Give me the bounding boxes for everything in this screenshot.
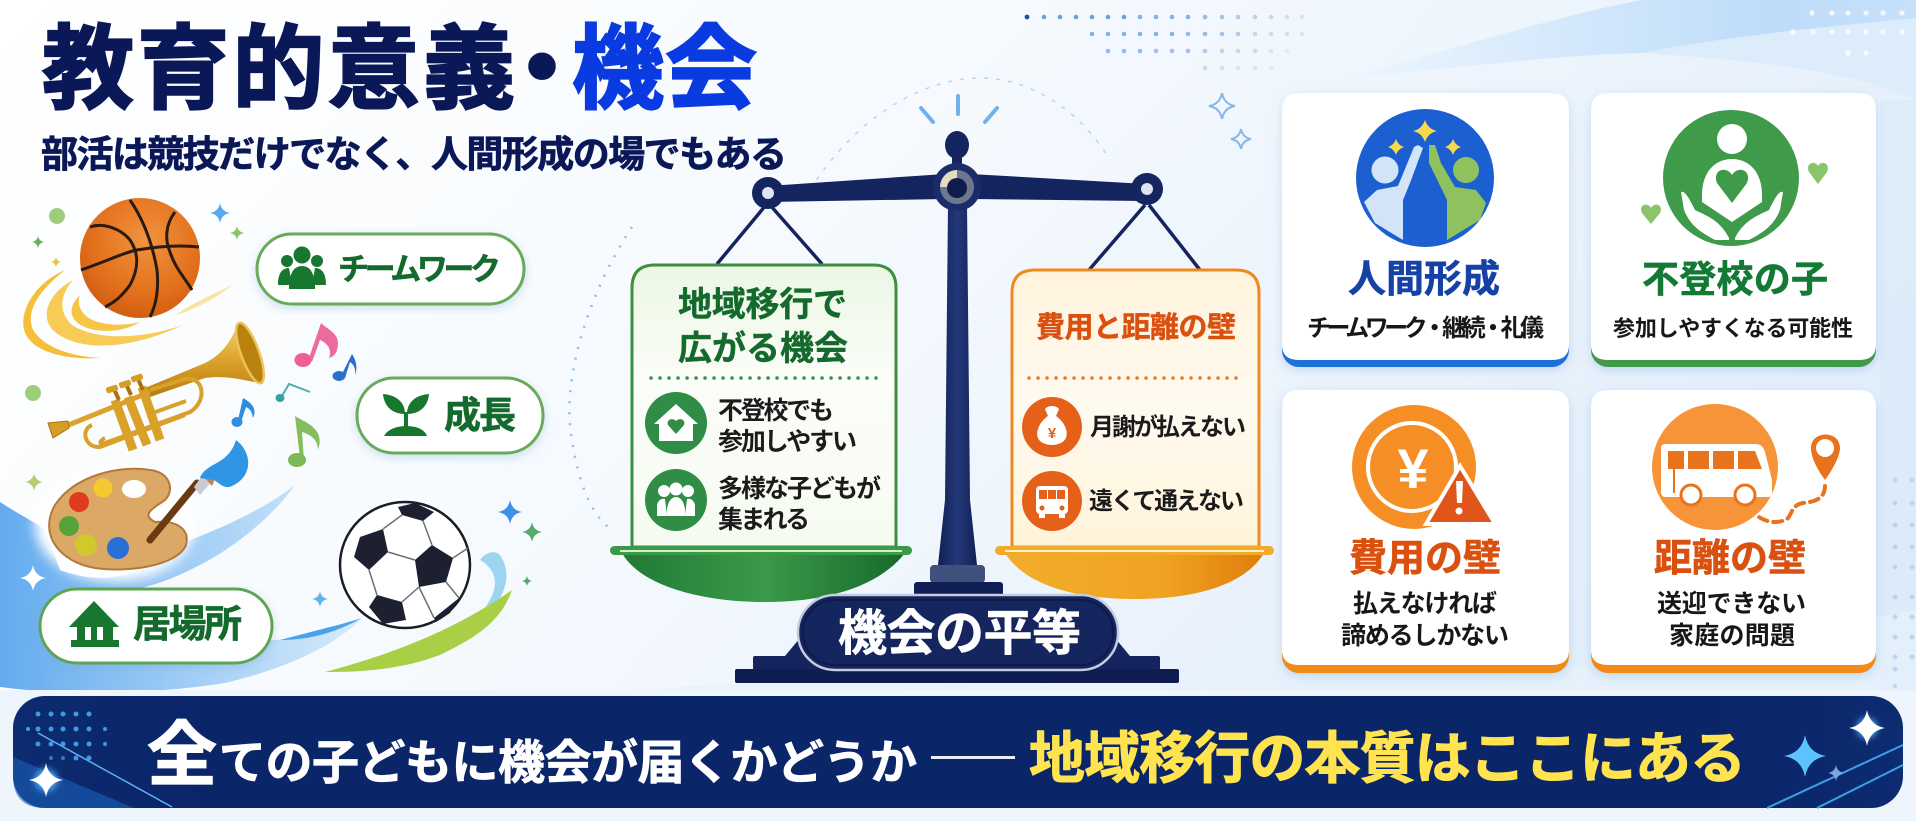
banner decoration: right: [1767, 710, 1903, 808]
icon: yen warning: ¥: [1397, 437, 1429, 500]
beam: [768, 174, 1147, 202]
icon: bus: [1022, 471, 1082, 531]
decorative dots: right: [1892, 478, 1914, 688]
icon: group: [645, 469, 707, 531]
description: チームワーク・継続・礼儀: [1307, 315, 1544, 342]
label: チームワーク: チームワーク: [338, 252, 501, 287]
strings: [717, 205, 1200, 270]
title: 機会: [572, 19, 757, 121]
description: 諦めるしかない: [1341, 622, 1509, 650]
heading: 費用と距離の壁: [1036, 311, 1236, 344]
bottom banner: [13, 696, 1903, 808]
decorative dots: top right: [1790, 10, 1905, 56]
description: 払えなければ: [1353, 590, 1497, 618]
illustration: basketball: [23, 198, 244, 358]
post: [938, 205, 977, 565]
divider: [1029, 376, 1243, 380]
left pan: [610, 546, 912, 602]
description: 送迎できない: [1657, 590, 1806, 618]
divider: [651, 376, 876, 380]
banner rule: [931, 756, 1015, 759]
badge: equality of opportunity: [798, 595, 1118, 670]
illustration: music notes: [25, 323, 356, 467]
card: 不登校の子: [1591, 93, 1876, 367]
description: [1341, 590, 1509, 650]
pill: growth: [357, 378, 543, 453]
text: 遠くて: 遠くて通えない: [1089, 488, 1244, 515]
decorative dots: top: [1025, 15, 1304, 70]
right pan: [995, 546, 1274, 599]
icon: money bag: ¥: [1048, 425, 1057, 442]
card: 費用の壁: [1282, 390, 1569, 673]
decorative arcs around scale: [569, 78, 1110, 530]
balance scale: [717, 131, 1200, 565]
description: 参加しやすくなる可能性: [1613, 316, 1853, 341]
sparkles: [1209, 93, 1251, 149]
icon: sprout: [383, 394, 429, 436]
icon: bus and route: [1652, 404, 1840, 530]
text: 不登校: 不登校でも: [718, 397, 834, 425]
panel: barriers: [1012, 270, 1259, 547]
icon: high five: [1356, 109, 1494, 247]
banner decoration: left: [13, 712, 172, 808]
card: 人間形成: [1282, 93, 1569, 367]
icon: money bag: [1022, 397, 1082, 457]
icon: yen warning: [1352, 405, 1494, 529]
title: 不登校の子: [1642, 259, 1828, 300]
heading: 地域移行で: [678, 286, 847, 324]
rays: [921, 96, 997, 122]
text: 不登校: [718, 397, 857, 456]
illustration: soccer ball: [280, 500, 542, 672]
pill: place to belong: [40, 589, 272, 663]
title: 距離の壁: [1654, 538, 1806, 580]
text: 月謝: 月謝が払えない: [1090, 413, 1246, 441]
pill: teamwork: [257, 234, 524, 304]
icon: home heart: [645, 392, 707, 454]
pivot: [933, 163, 981, 211]
illustration: trumpet: [48, 320, 269, 450]
text: 多様: 多様な子どもが: [718, 474, 881, 503]
icon: people: [278, 246, 326, 289]
finial: [945, 131, 969, 159]
panel: opportunities: 広がる機会: [678, 329, 848, 368]
text: 不登校: 参加しやすい: [718, 428, 857, 456]
illustration: palette and brush: [20, 440, 248, 591]
badge: equality of opportunity: 機会の平等: [838, 607, 1081, 661]
subtitle: 部活は競技だけでなく、人間形成の場でもある: [41, 134, 787, 175]
card: 距離の壁: [1591, 390, 1876, 673]
banner text: white: [147, 716, 917, 794]
description: 家庭の問題: [1669, 622, 1795, 650]
label: 居場所: 居場所: [133, 604, 242, 646]
label: 成長: 成長: [444, 395, 516, 436]
title: 費用の壁: [1349, 538, 1501, 580]
title: 教育的意義: [42, 19, 515, 121]
title: 人間形成: [1348, 259, 1500, 301]
text: 多様: [718, 474, 881, 534]
text: 多様: 集まれる: [718, 506, 810, 534]
scale base: [735, 565, 1179, 683]
icon: house: [69, 601, 119, 647]
title: [42, 19, 757, 121]
title: ・: [496, 19, 588, 121]
panel: opportunities: [632, 265, 896, 547]
icon: caring hands: [1641, 110, 1828, 246]
banner text: white: 全: [147, 716, 217, 794]
banner text: white: ての子どもに機会が届くかどうか: [219, 736, 917, 789]
description: [1657, 590, 1806, 650]
banner text: yellow: 地域移行の本質はここにある: [1029, 727, 1746, 790]
